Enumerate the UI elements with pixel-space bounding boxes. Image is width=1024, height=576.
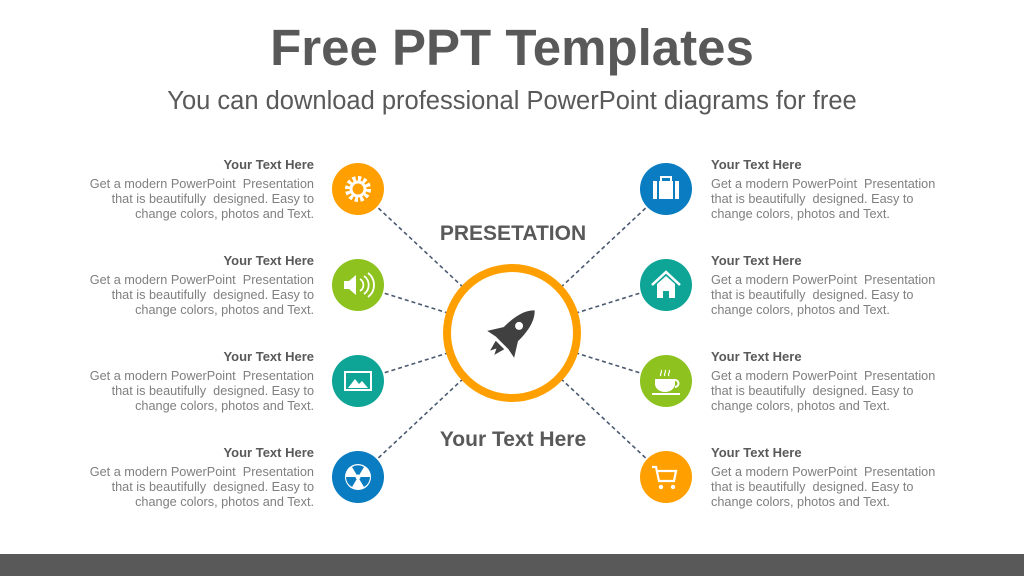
heading: Your Text Here: Your Text Here [440, 428, 586, 451]
subtitle: You can download professional PowerPoint diagrams for free [167, 87, 857, 115]
text block: right 2: Your Text Here [711, 253, 802, 268]
text block: right 4: that is beautifully designed. Easy to [711, 480, 913, 494]
text block: right 4: change colors, photos and Text. [711, 495, 890, 509]
icon: cart [640, 451, 692, 503]
text block: right 2: that is beautifully designed. Easy to [711, 288, 913, 302]
text block: right 1: Get a modern PowerPoint Presentation [711, 177, 935, 191]
text block: left 2: Get a modern PowerPoint Presentation [90, 273, 314, 287]
text block: left 2 [90, 253, 314, 317]
text block: left 4 [90, 445, 314, 509]
text block: left 3: Get a modern PowerPoint Presentation [90, 369, 314, 383]
icon: picture [332, 355, 384, 407]
text block: left 3 [90, 349, 314, 413]
text block: left 3: that is beautifully designed. Easy to [112, 384, 314, 398]
text block: right 1 [711, 157, 935, 221]
footer bar [0, 554, 1024, 576]
icon: rocket [479, 297, 548, 366]
text block: left 1 [90, 157, 314, 221]
text block: right 1: that is beautifully designed. Easy to [711, 192, 913, 206]
text block: right 3: that is beautifully designed. Easy to [711, 384, 913, 398]
text block: left 2: change colors, photos and Text. [135, 303, 314, 317]
text block: left 1: that is beautifully designed. Easy to [112, 192, 314, 206]
text block: right 3 [711, 349, 935, 413]
text block: left 3: change colors, photos and Text. [135, 399, 314, 413]
center circle [447, 268, 577, 398]
text block: left 4: Your Text Here [223, 445, 314, 460]
text block: right 4: Your Text Here [711, 445, 802, 460]
text block: right 3: Your Text Here [711, 349, 802, 364]
text block: left 4: Get a modern PowerPoint Presentation [90, 465, 314, 479]
text block: right 4 [711, 445, 935, 509]
text block: right 1: change colors, photos and Text. [711, 207, 890, 221]
icon: radiation [332, 451, 384, 503]
title: Free PPT Templates [270, 19, 754, 76]
text block: left 4: change colors, photos and Text. [135, 495, 314, 509]
text block: right 2: change colors, photos and Text. [711, 303, 890, 317]
text block: left 2: that is beautifully designed. Easy to [112, 288, 314, 302]
icon: coffee cup [640, 355, 692, 407]
text block: right 3: change colors, photos and Text. [711, 399, 890, 413]
text block: left 4: that is beautifully designed. Easy to [112, 480, 314, 494]
icon: house [640, 259, 692, 311]
text block: left 1: Your Text Here [223, 157, 314, 172]
text block: right 2 [711, 253, 935, 317]
text block: left 2: Your Text Here [223, 253, 314, 268]
text block: left 1: Get a modern PowerPoint Presentation [90, 177, 314, 191]
text block: left 1: change colors, photos and Text. [135, 207, 314, 221]
text block: right 3: Get a modern PowerPoint Presentation [711, 369, 935, 383]
text block: right 2: Get a modern PowerPoint Presentation [711, 273, 935, 287]
icon: gear [332, 163, 384, 215]
icon: speaker [332, 259, 384, 311]
text block: right 4: Get a modern PowerPoint Presentation [711, 465, 935, 479]
text block: right 1: Your Text Here [711, 157, 802, 172]
text block: left 3: Your Text Here [223, 349, 314, 364]
heading: PRESETATION: PRESETATION [440, 222, 586, 245]
icon: briefcase [640, 163, 692, 215]
